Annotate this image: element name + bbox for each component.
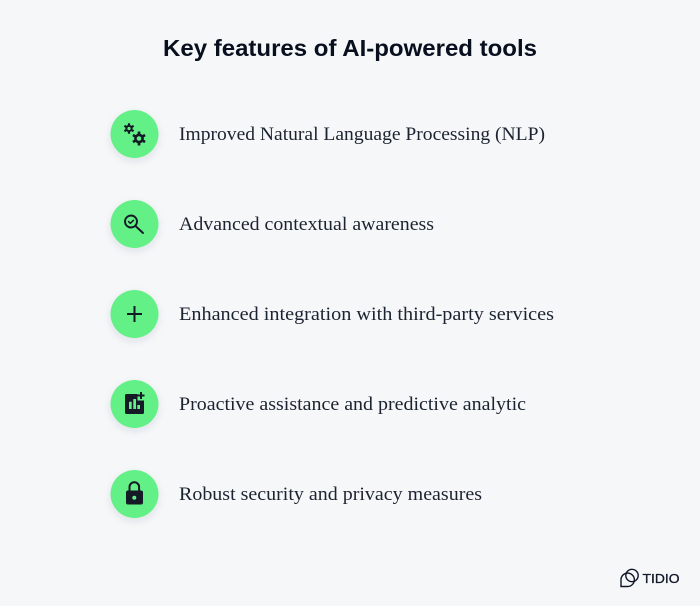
title: Key features of AI-powered tools (163, 35, 537, 61)
icon: padlock (110, 470, 158, 518)
icon: bar chart with plus (110, 380, 158, 428)
feature row: security and privacy (110, 470, 482, 518)
label: Improved Natural Language Processing (NLP) (179, 124, 545, 145)
icon: plus (110, 290, 158, 338)
logo wordmark: TIDIO (642, 572, 680, 586)
label: Proactive assistance and predictive analytic (179, 394, 526, 415)
label: Robust security and privacy measures (179, 484, 482, 505)
label: Advanced contextual awareness (179, 214, 434, 235)
label: Enhanced integration with third-party services (179, 304, 554, 325)
logo: Tidio (621, 569, 680, 586)
feature row: natural language processing (110, 110, 545, 158)
feature row: contextual awareness (110, 200, 434, 248)
logo mark (621, 569, 638, 586)
feature row: predictive analytics (110, 380, 526, 428)
feature row: third-party integration (110, 290, 554, 338)
icon: magnifier with check (110, 200, 158, 248)
icon: gears (110, 110, 158, 158)
